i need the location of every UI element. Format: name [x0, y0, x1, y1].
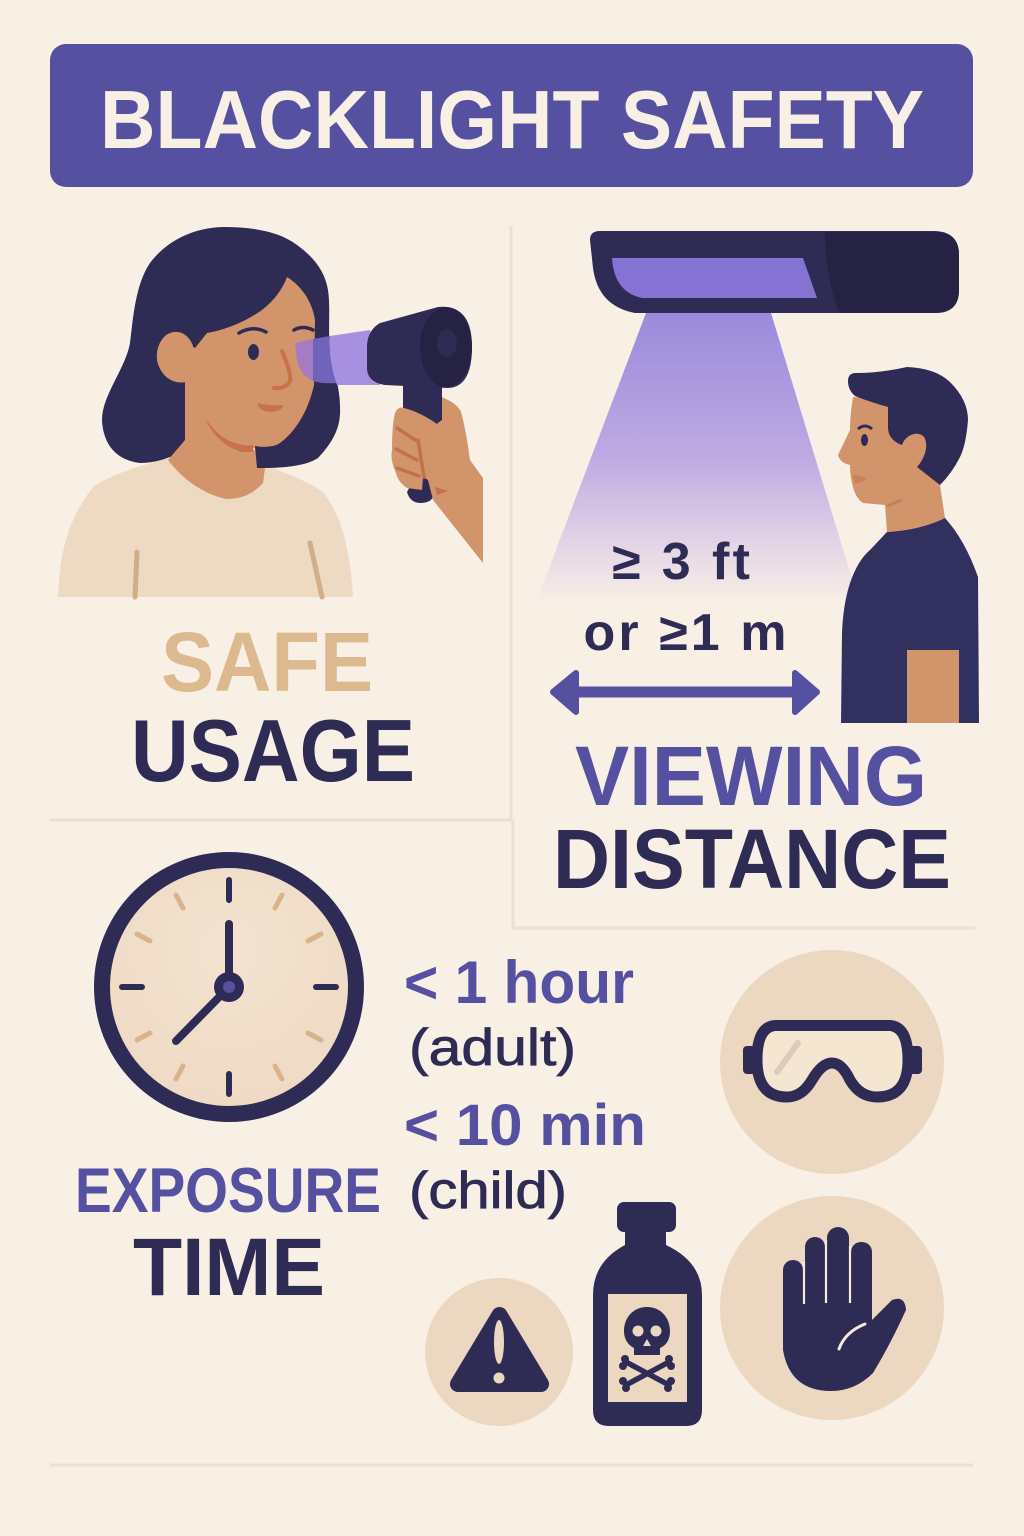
skull and crossbones: [619, 1307, 675, 1392]
exposure limits: (child): [409, 1162, 567, 1220]
light beam: [295, 330, 380, 385]
icon: safety goggles: [720, 950, 944, 1174]
illustration: woman with blacklight at eye: [58, 227, 483, 597]
heading: safe usage: [131, 615, 415, 800]
heading: exposure time: TIME: [133, 1222, 325, 1313]
exposure limits: [404, 949, 646, 1220]
icon: ceiling blacklight beam: [535, 231, 959, 605]
panel: safe usage: [58, 227, 483, 800]
icon: stop hand: [720, 1196, 944, 1420]
distance label: or ≥1 m: [584, 604, 786, 662]
icon: clock: [102, 860, 356, 1114]
title banner: [50, 44, 973, 187]
illustration: man standing: [838, 367, 979, 723]
icon: warning triangle: [425, 1278, 573, 1426]
heading: viewing distance: [553, 729, 951, 906]
distance label: [584, 533, 786, 662]
heading: viewing distance: DISTANCE: [553, 812, 951, 906]
exposure limits: (adult): [409, 1019, 576, 1077]
arrow: double-headed distance: [553, 673, 817, 712]
heading: exposure time: [75, 1156, 381, 1313]
hand: [392, 397, 483, 563]
heading: viewing distance: VIEWING: [575, 729, 927, 823]
icon: poison bottle: [593, 1202, 702, 1426]
heading: exposure time: EXPOSURE: [75, 1156, 381, 1226]
distance label: ≥ 3 ft: [612, 533, 750, 591]
panel: viewing distance: [535, 231, 979, 906]
heading: safe usage: USAGE: [131, 701, 415, 800]
exposure limits: < 10 min: [404, 1093, 646, 1158]
device: [367, 307, 472, 424]
exposure limits: < 1 hour: [404, 949, 634, 1016]
title banner: BLACKLIGHT SAFETY: [100, 73, 924, 166]
panel: exposure time: [75, 860, 646, 1313]
heading: safe usage: SAFE: [161, 615, 373, 709]
